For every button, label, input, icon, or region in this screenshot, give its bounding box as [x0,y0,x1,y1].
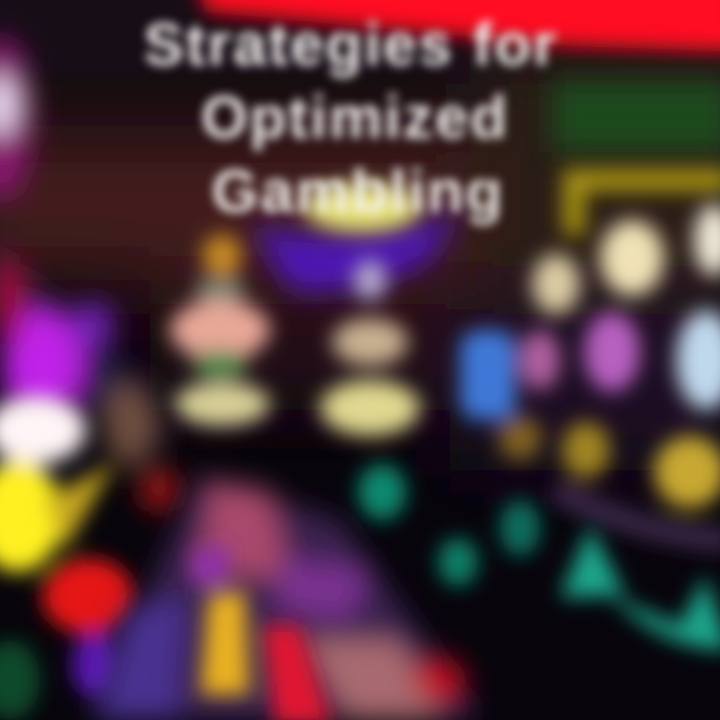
title line 2: Optimized [201,84,509,151]
red banner [195,0,720,52]
left pillar lights [170,234,420,520]
left wheel [0,36,32,200]
green sign [552,80,720,152]
title line 1: Strategies for [144,11,558,78]
striped carpet [90,475,480,720]
left colourful machine [0,240,180,512]
purple glow under title [250,210,460,292]
yellow frame [574,180,720,235]
teal arrows [438,500,720,650]
title line 3: Gambling [212,158,504,225]
slot machines [460,204,720,540]
yellow lamp [304,184,420,232]
